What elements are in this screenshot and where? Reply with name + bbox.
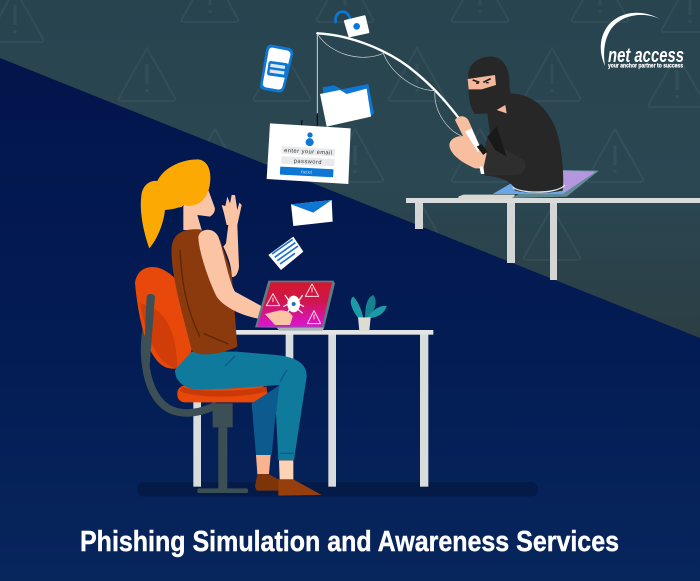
- hacker at laptop: [449, 57, 599, 199]
- laptop: [458, 170, 599, 199]
- login form card on hook: enter your email: [284, 148, 333, 157]
- floor shadow: [137, 482, 538, 496]
- lower desk with legs: [193, 330, 433, 487]
- login form card on hook: next: [301, 169, 313, 176]
- fishing rod and line: [302, 33, 465, 137]
- icon: open padlock: [336, 12, 368, 36]
- login form card on hook: password: [294, 159, 322, 166]
- hands: [449, 116, 487, 168]
- icon: smartphone: [260, 45, 293, 92]
- icon: credit card: [268, 237, 303, 270]
- woman at desk: [141, 159, 335, 496]
- login form card on hook: [267, 123, 351, 184]
- potted plant: [351, 295, 387, 331]
- icon: envelope: [291, 200, 333, 226]
- office chair: [135, 267, 267, 493]
- upper desk with legs: [406, 198, 700, 280]
- laptop with warnings: [255, 281, 335, 331]
- trousers, socks and shoes: [175, 352, 322, 496]
- logo: net access: [601, 13, 684, 70]
- torso, arms, head and hair: [141, 159, 293, 354]
- warning triangle pattern: [0, 0, 700, 260]
- logo: net access: your anchor partner to success: [608, 64, 684, 70]
- background: dark teal diagonal panel: [0, 0, 700, 338]
- icon: folder: [320, 84, 374, 127]
- hooded figure: [449, 57, 565, 193]
- title: Phishing Simulation and Awareness Services: [80, 526, 619, 558]
